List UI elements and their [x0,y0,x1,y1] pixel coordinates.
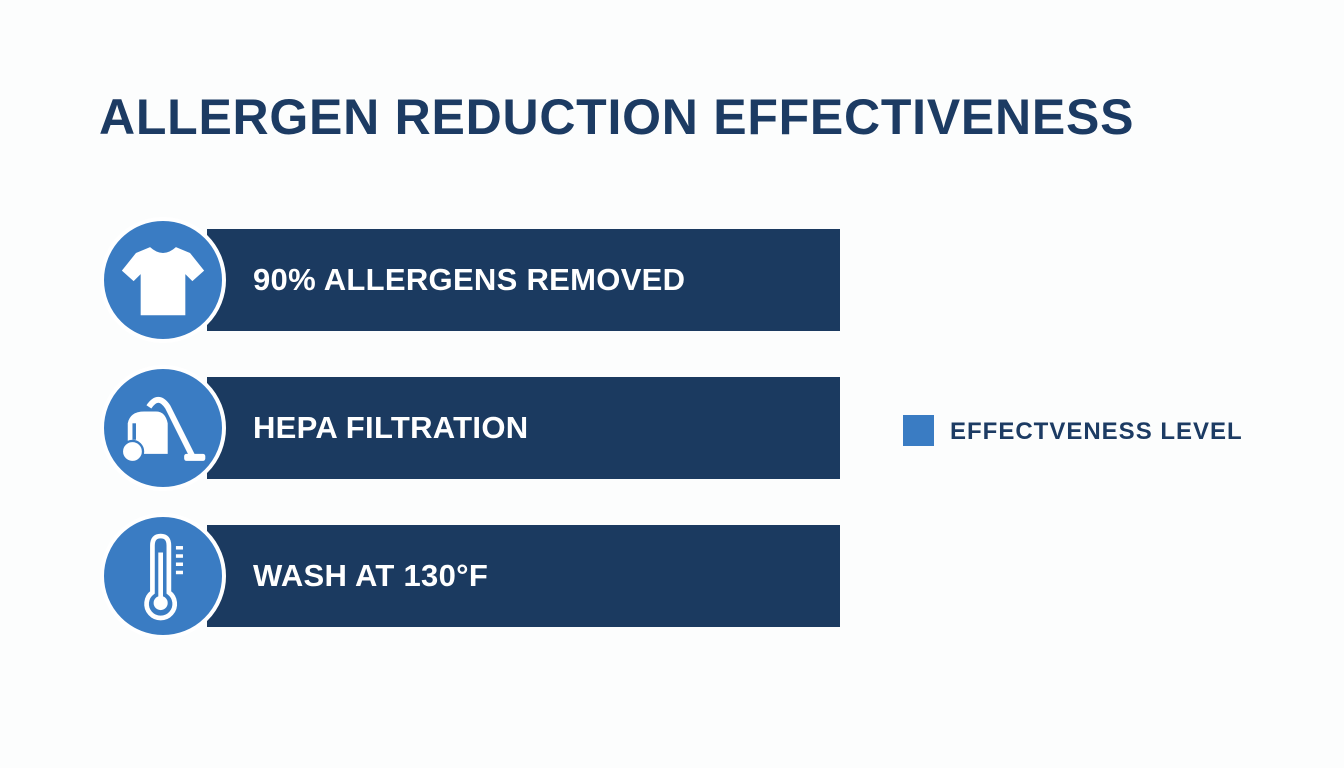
row: wash [104,517,840,635]
legend: EFFECTVENESS LEVEL [950,418,1243,445]
bar: wash at 130F [207,525,840,627]
row: HEPA [104,369,840,487]
bar: 90% allergens removed [207,229,840,331]
icon: vacuum [100,365,226,491]
icon: t-shirt [100,217,226,343]
title: ALLERGEN REDUCTION EFFECTIVENESS [99,89,1134,145]
bar: HEPA filtration [207,377,840,479]
row: allergens removed [104,221,840,339]
bar: HEPA filtration: HEPA FILTRATION [253,410,528,445]
bar: wash at 130F: WASH AT 130°F [253,558,488,593]
bar: 90% allergens removed: 90% ALLERGENS REMOVED [253,262,685,297]
icon: thermometer [100,513,226,639]
